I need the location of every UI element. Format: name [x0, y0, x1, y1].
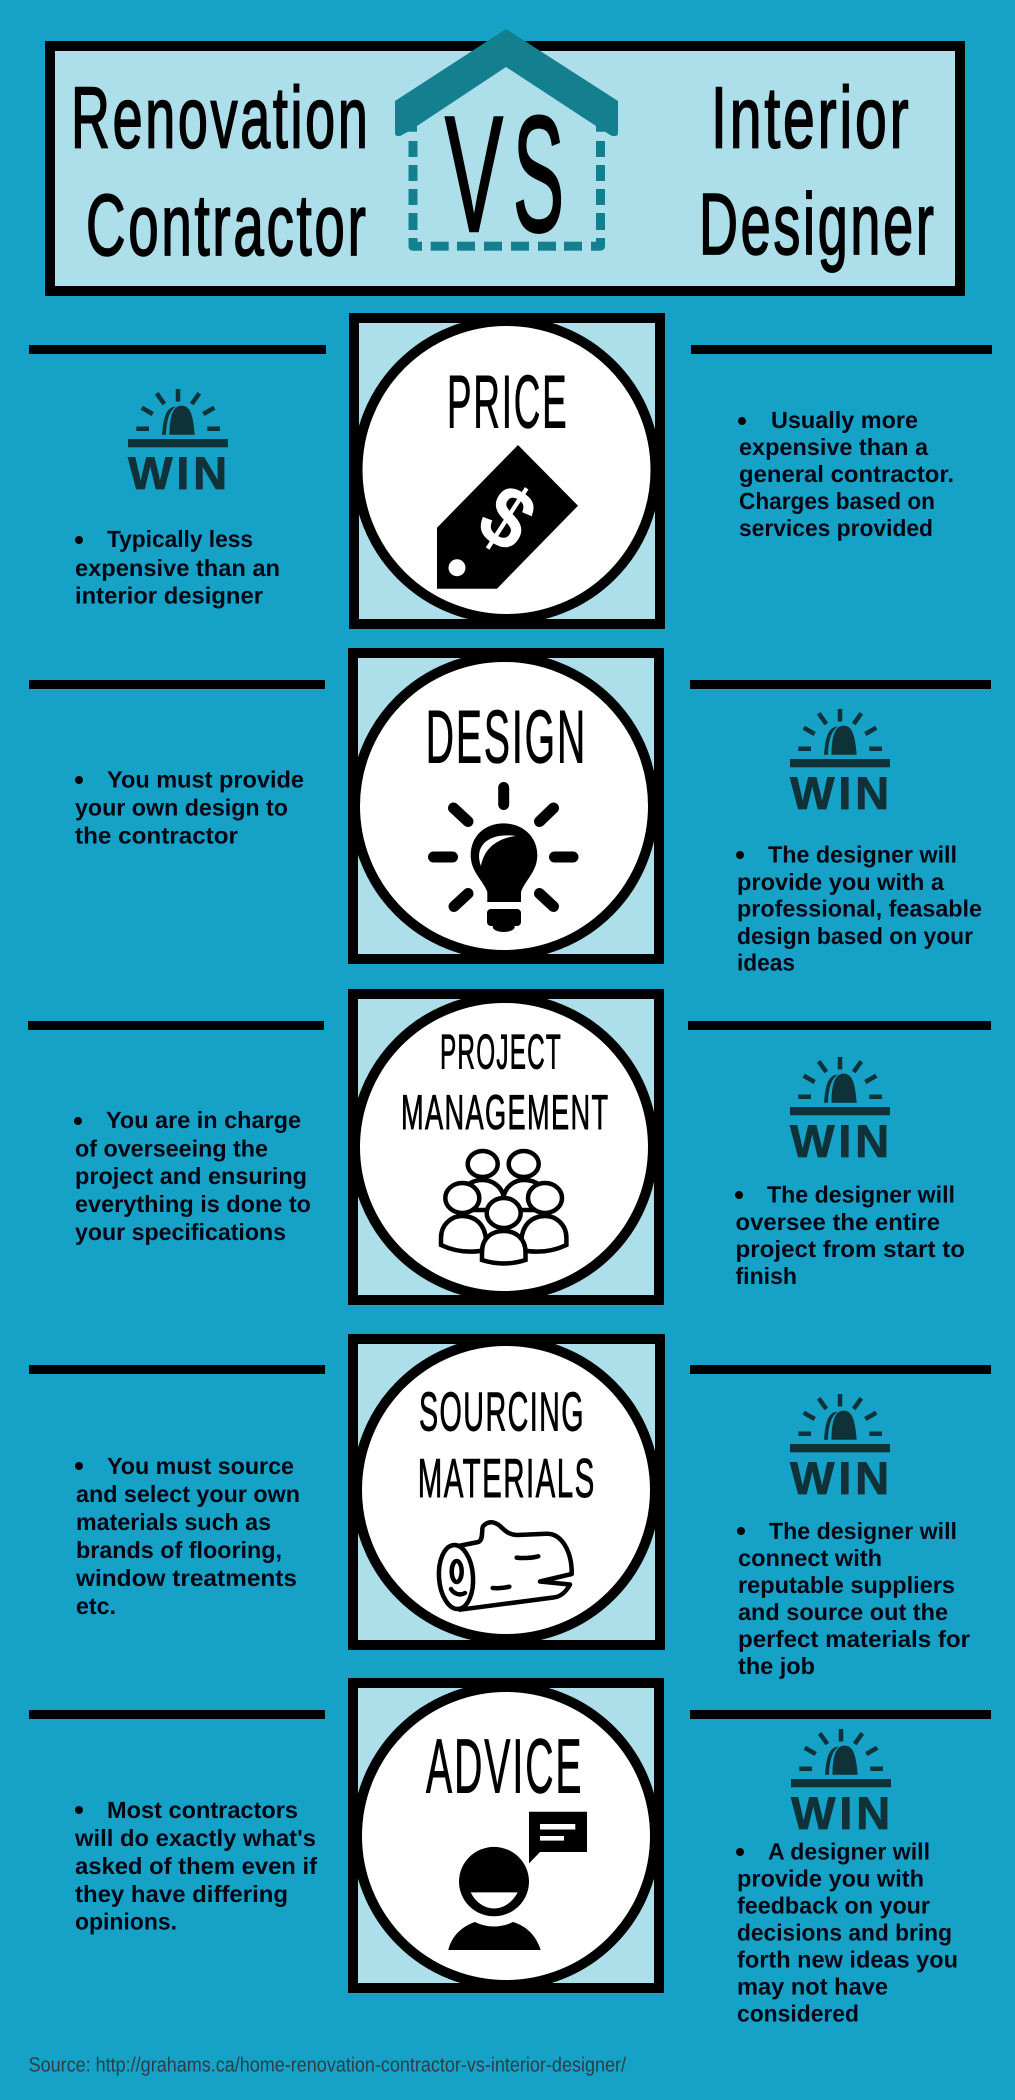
text block: may not have — [737, 1974, 888, 2000]
icon: win siren — [791, 1729, 894, 1839]
text block: the contractor — [75, 822, 238, 848]
text block: they have differing — [75, 1881, 288, 1907]
text block: window treatments — [75, 1565, 297, 1591]
text block: and source out the — [738, 1599, 948, 1625]
text block: provide you with — [737, 1866, 924, 1892]
right column: designer on project management — [688, 1021, 991, 1289]
row: price — [29, 318, 992, 624]
text block: asked of them even if — [75, 1853, 317, 1879]
icon: win siren: WIN — [790, 1452, 893, 1504]
icon: win siren: WIN — [791, 1787, 894, 1839]
heading: PROJECT MANAGEMENT: MANAGEMENT — [401, 1086, 610, 1140]
text block: Typically less — [107, 526, 253, 552]
text block: ideas — [737, 950, 795, 976]
panel: advice — [353, 1683, 659, 1988]
source credit: Source: http://grahams.ca/home-renovation-contractor-vs-interior-designer/ — [29, 2054, 626, 2077]
icon: win siren: WIN — [790, 1115, 893, 1167]
left column: contractor on advice — [29, 1710, 325, 1934]
right column: designer on price — [691, 345, 992, 541]
icon: win siren: WIN — [128, 447, 231, 499]
title: Interior Designer — [699, 70, 936, 273]
text block: the job — [738, 1653, 815, 1679]
text block: forth new ideas you — [737, 1947, 958, 1973]
text block: Most contractors — [107, 1797, 298, 1823]
text block: your own design to — [75, 794, 288, 820]
icon: win siren — [790, 1394, 893, 1504]
text block: reputable suppliers — [738, 1572, 955, 1598]
header panel: S — [513, 82, 564, 266]
text block: finish — [736, 1263, 797, 1289]
text block — [74, 1797, 317, 1934]
heading: SOURCING MATERIALS: MATERIALS — [418, 1447, 596, 1509]
right column: designer on design — [690, 680, 991, 976]
text block: You must source — [107, 1453, 294, 1479]
text block — [738, 407, 954, 541]
icon: house outline — [395, 29, 618, 251]
icon: win siren — [790, 709, 893, 819]
icon: group of people — [441, 1151, 566, 1264]
right column: designer on advice — [690, 1710, 991, 2027]
title: VS: V — [445, 82, 503, 266]
text block: You must provide — [107, 767, 304, 793]
text block: provide you with a — [737, 869, 945, 895]
text block: project and ensuring — [75, 1163, 307, 1189]
text block: general contractor. — [739, 461, 954, 487]
text block: feedback on your — [737, 1892, 930, 1918]
title: Renovation Contractor: Renovation — [71, 70, 370, 166]
text block: considered — [737, 2001, 859, 2027]
text block: design based on your — [737, 923, 973, 949]
left column: contractor on price — [29, 345, 326, 608]
heading: PROJECT MANAGEMENT — [401, 1025, 610, 1140]
icon: light bulb — [434, 788, 573, 932]
text block — [736, 842, 982, 976]
text block: oversee the entire — [736, 1209, 940, 1235]
icon: price tag — [437, 445, 578, 589]
text block: perfect materials for — [738, 1626, 970, 1652]
text block: Charges based on — [739, 488, 935, 514]
text block — [735, 1181, 965, 1289]
text block: services provided — [739, 515, 933, 541]
text block: brands of flooring, — [76, 1537, 282, 1563]
text block: interior designer — [75, 582, 263, 608]
icon: person with speech bubble — [448, 1812, 587, 1950]
icon: win siren — [790, 1057, 893, 1167]
text block: Usually more — [771, 407, 918, 433]
left column: contractor on project management — [28, 1021, 324, 1245]
row: design — [29, 653, 991, 976]
text block: professional, feasable — [737, 896, 982, 922]
text block: A designer will — [768, 1839, 930, 1865]
text block: your specifications — [75, 1219, 286, 1245]
text block: opinions. — [75, 1908, 177, 1934]
text block: connect with — [738, 1545, 882, 1571]
panel: price: PRICE — [447, 360, 568, 444]
left column: contractor on design — [29, 680, 325, 848]
panel: design — [353, 653, 659, 959]
title: Interior Designer: Interior — [711, 70, 912, 166]
row: sourcing materials — [29, 1339, 991, 1679]
panel: project management — [353, 994, 659, 1300]
row: advice — [29, 1683, 991, 2027]
text block — [737, 1518, 970, 1679]
text block: materials such as — [76, 1509, 271, 1535]
icon: wood log — [437, 1522, 572, 1610]
heading: PROJECT MANAGEMENT: PROJECT — [440, 1025, 562, 1079]
text block: will do exactly what's — [74, 1825, 316, 1851]
row: project management — [28, 994, 991, 1300]
right column: designer on sourcing — [690, 1365, 991, 1679]
text block: You are in charge — [106, 1107, 301, 1133]
text block: The designer will — [768, 842, 957, 868]
left column: contractor on sourcing — [29, 1365, 325, 1619]
text block: The designer will — [767, 1181, 955, 1207]
text block — [75, 526, 280, 608]
panel: price — [354, 318, 660, 624]
text block: everything is done to — [75, 1191, 311, 1217]
text block: The designer will — [769, 1518, 957, 1544]
text block — [75, 767, 304, 848]
text block — [736, 1839, 958, 2027]
text block: project from start to — [736, 1236, 965, 1262]
text block — [75, 1453, 300, 1619]
icon: price tag: $ — [462, 464, 553, 571]
text block: expensive than an — [75, 555, 280, 581]
text block: expensive than a — [739, 434, 929, 460]
title: Renovation Contractor — [71, 70, 370, 274]
text block: decisions and bring — [737, 1920, 952, 1946]
icon: win siren — [128, 389, 231, 499]
text block: and select your own — [76, 1481, 300, 1507]
heading: ADVICE: ADVICE — [426, 1724, 584, 1810]
heading: SOURCING MATERIALS: SOURCING — [419, 1381, 585, 1443]
title: Renovation Contractor: Contractor — [86, 177, 368, 274]
header panel — [50, 29, 960, 291]
heading: SOURCING MATERIALS — [418, 1381, 596, 1509]
heading: DESIGN: DESIGN — [426, 695, 587, 779]
text block: etc. — [76, 1593, 116, 1619]
panel: sourcing materials — [353, 1339, 660, 1645]
icon: win siren: WIN — [790, 767, 893, 819]
text block: of overseeing the — [75, 1136, 268, 1162]
text block — [74, 1107, 311, 1245]
